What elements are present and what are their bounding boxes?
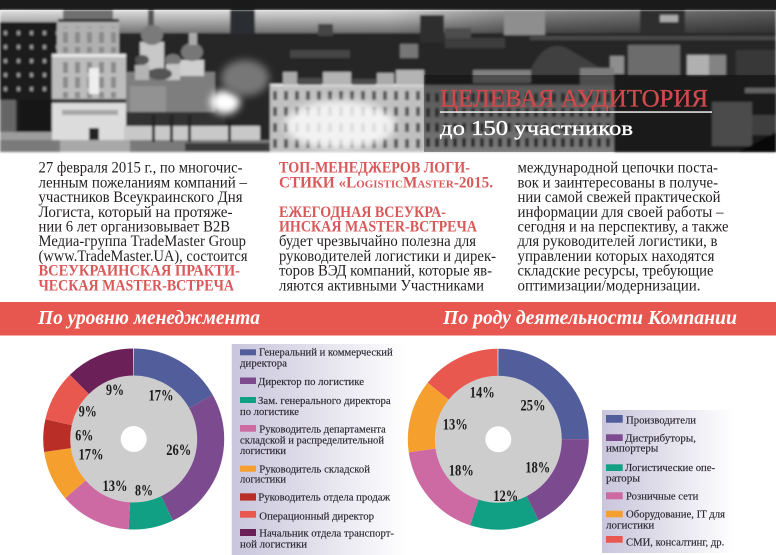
legend: management level: логистики (240, 474, 286, 486)
legend: company activity: СМИ, консалтинг, др. (626, 537, 724, 549)
long building (270, 85, 424, 152)
legend: management level: Руководитель складской (259, 463, 370, 475)
heading: target audience: до 150 участников (440, 116, 633, 140)
donut chart: management level: 13% (102, 478, 128, 495)
donut chart: management level: 6% (75, 428, 93, 445)
legend: management level (232, 344, 407, 555)
text column 2: ТОП-МЕНЕДЖЕРОВ ЛОГИ- (279, 160, 470, 176)
donut chart: management level: 17% (148, 388, 174, 405)
text column 3: информации для своей работы – (518, 204, 724, 221)
heading: by company activity: По роду деятельности Компании (442, 307, 737, 329)
section banner (0, 302, 776, 336)
legend: company activity: Производители (626, 414, 696, 426)
legend: management level: логистики (240, 445, 286, 457)
text column 1: нии 6 лет организовывает B2B (38, 218, 230, 236)
legend: management level: ной логистики (240, 538, 307, 550)
legend: management level: Начальник отдела транспорт- (259, 528, 394, 540)
text column 1: ЧЕСКАЯ MASTER-ВСТРЕЧА (38, 277, 234, 294)
text column 2: СТИКИ «LogisticMaster-2015. (279, 174, 493, 191)
legend: management level: Зам. генерального директора (258, 395, 391, 407)
legend: management level: складской и распределительной (240, 434, 384, 446)
text column 3: оптимизации/модернизации. (518, 277, 700, 294)
legend: management level: Руководитель департамента (259, 424, 386, 436)
dark overlay behind heading (424, 75, 776, 152)
text column 3: сегодня и на перспективу, а также (518, 218, 729, 236)
legend: management level: Руководитель отдела продаж (258, 492, 391, 504)
wall and square (124, 126, 260, 140)
text column 2: руководителей логистики и дирек- (279, 248, 496, 265)
heading: target audience: ЦЕЛЕВАЯ АУДИТОРИЯ (440, 84, 708, 112)
text column 3: вок и заинтересованы в получе- (518, 174, 718, 191)
legend: company activity: Оборудование, IT для (626, 509, 725, 521)
heading: by management level: По уровню менеджмента (37, 307, 260, 329)
donut chart: company activity: 18% (449, 463, 474, 480)
text column 1: ленным пожеланиям компаний – (38, 174, 247, 191)
text column 3: нии самой свежей практической (518, 189, 720, 206)
donut chart: company activity: 14% (470, 385, 495, 402)
legend: company activity: Дистрибуторы, (625, 433, 696, 445)
legend: company activity: Логистические опе- (625, 462, 715, 474)
text column 2: будет чрезвычайно полезна для (279, 233, 476, 250)
legend: company activity: логистики (606, 519, 655, 531)
top black band (0, 0, 776, 10)
legend: company activity: раторы (606, 473, 640, 485)
donut chart: management level: 9% (79, 404, 97, 421)
donut chart: company activity (421, 362, 575, 516)
text column 1: ВСЕУКРАИНСКАЯ ПРАКТИ- (38, 263, 240, 280)
text column 2: ИНСКАЯ MASTER-ВСТРЕЧА (279, 218, 477, 236)
text column 1: Медиа-группа TradeMaster Group (38, 233, 246, 250)
text column 3: складские ресурсы, требующие (518, 263, 714, 280)
donut chart: company activity: 13% (443, 416, 468, 433)
donut chart: company activity: 12% (493, 488, 518, 505)
cathedral (125, 72, 215, 118)
text column 1: (www.TradeMaster.UA), состоится (38, 248, 248, 265)
text column 3: управлении которых находятся (518, 248, 714, 265)
legend: company activity (602, 410, 734, 553)
trees (152, 115, 155, 142)
legend: management level: по логистике (240, 406, 299, 418)
bell tower (63, 10, 113, 20)
text column 2 (279, 160, 496, 294)
legend: company activity: импортеры (606, 443, 658, 455)
legend: management level: Директор по логистике (258, 376, 364, 388)
text column 1 (38, 160, 248, 294)
text column 3: для руководителей логистики, в (518, 233, 718, 250)
text column 2: ЕЖЕГОДНАЯ ВСЕУКРА- (279, 204, 446, 221)
text column 1: участников Всеукраинского Дня (38, 189, 242, 206)
legend: management level: директора (240, 358, 287, 370)
donut chart: management level: 9% (106, 382, 124, 399)
text column 2: торов ВЭД компаний, которые яв- (279, 263, 492, 280)
text column 1: Логиста, который на протяже- (38, 204, 232, 221)
photo: Kyiv night cityscape (0, 10, 776, 152)
donut chart: management level: 26% (166, 442, 191, 459)
donut chart: management level (57, 362, 211, 516)
donut chart: company activity: 25% (520, 398, 546, 415)
donut chart: company activity: 18% (525, 459, 550, 476)
text column 1: 27 февраля 2015 г., по многочис- (38, 160, 242, 176)
donut chart: management level: 17% (78, 446, 104, 463)
text column 3: международной цепочки поста- (518, 160, 718, 176)
legend: management level: Операционный директор (259, 510, 374, 522)
text column 3 (518, 160, 729, 294)
heading: target audience (440, 84, 712, 140)
legend: company activity: Розничные сети (626, 490, 699, 502)
donut chart: management level: 8% (135, 483, 153, 500)
right lower block (424, 75, 776, 152)
text column 2: ляются активными Участниками (279, 277, 484, 294)
legend: management level: Генеральний и коммерческий (259, 347, 393, 359)
